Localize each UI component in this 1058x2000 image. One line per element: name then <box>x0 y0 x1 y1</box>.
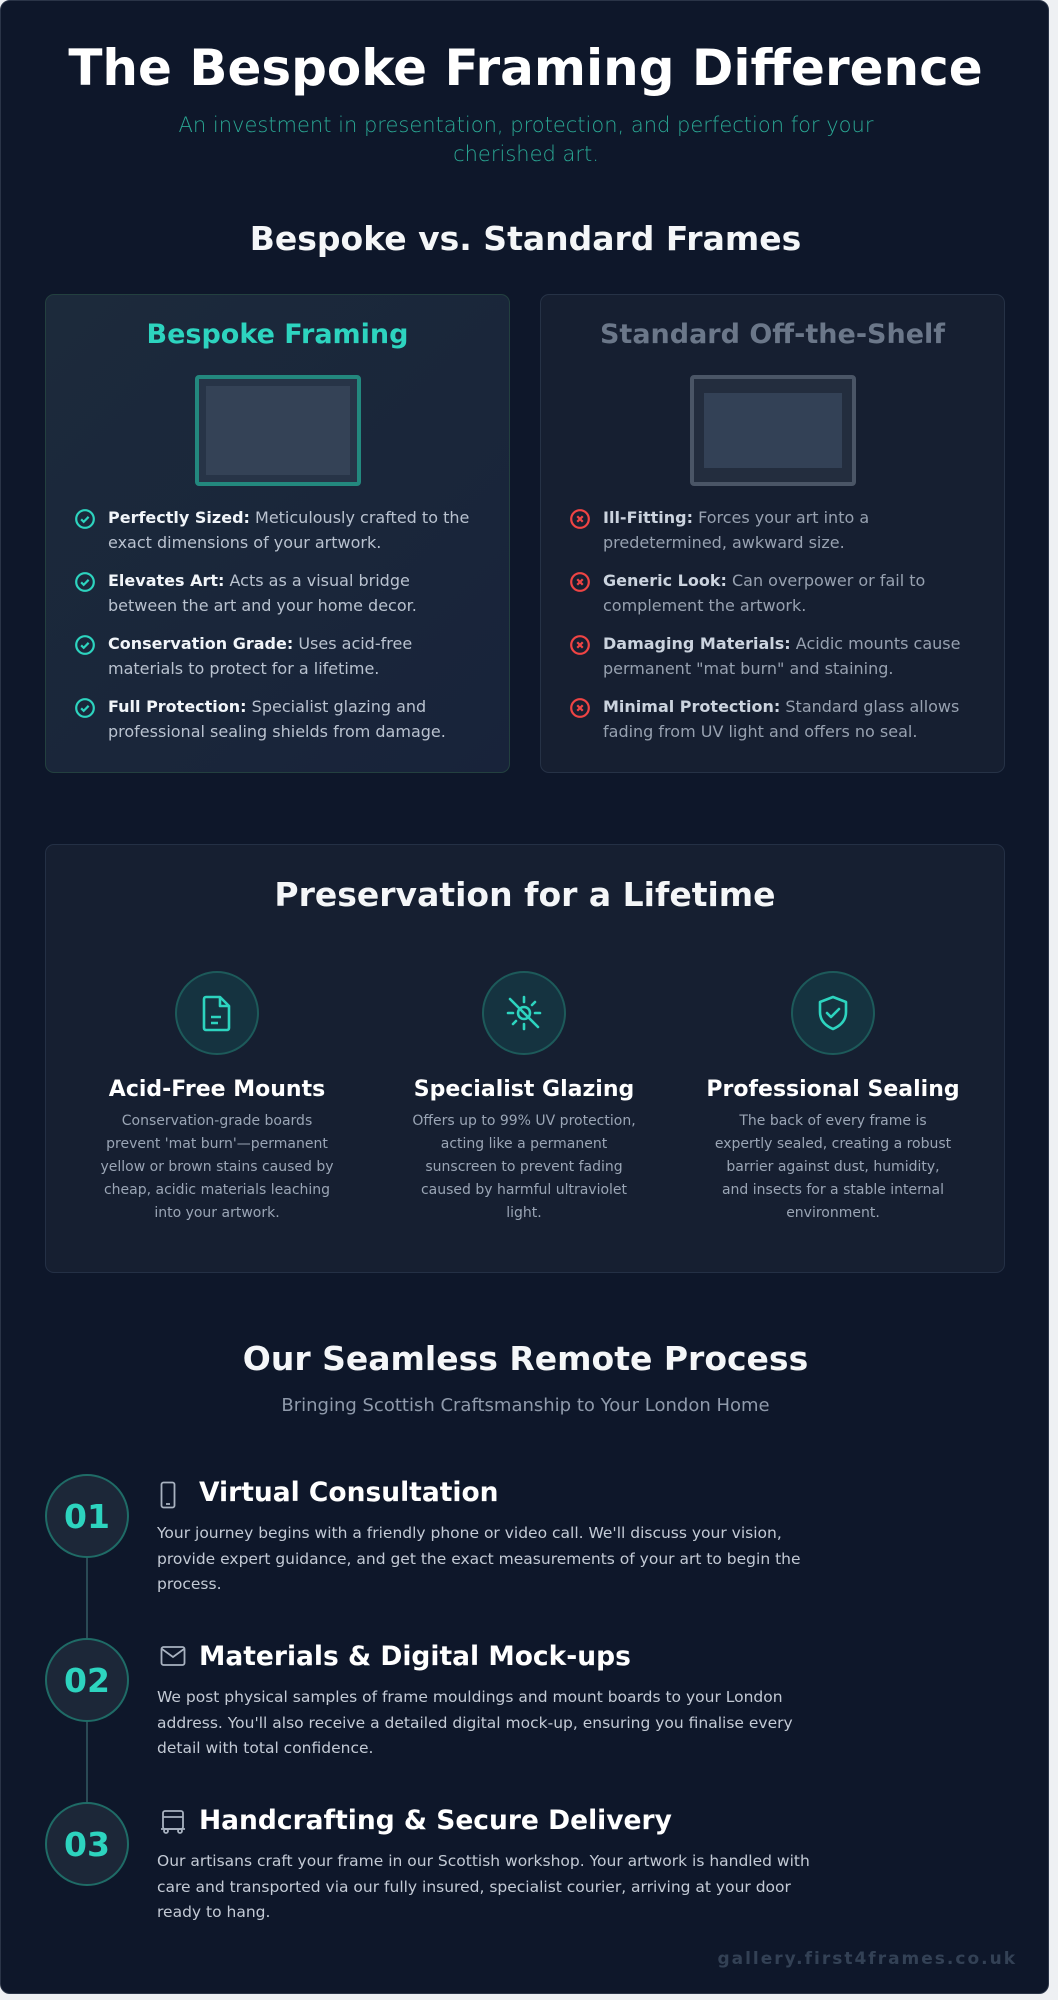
step 03: 03 <box>64 1824 110 1864</box>
text: Handcrafting & Secure Delivery <box>199 1805 672 1836</box>
feature: acid-free mounts: Conservation-grade boards prevent 'mat burn'—permanent yellow or brown stains caused by cheap, acidic materials leaching into your artwork. <box>100 1113 334 1221</box>
feature: specialist glazing: Offers up to 99% UV protection, acting like a permanent sunscreen to prevent fading caused by harmful ultraviolet light. <box>412 1113 636 1221</box>
list: bespoke benefits: Conservation Grade: Uses acid-free materials to protect for a lifetime. <box>108 634 412 678</box>
card title standard: Standard Off-the-Shelf <box>600 319 945 350</box>
title: The Bespoke Framing Difference <box>68 39 983 97</box>
step 03 <box>45 1802 129 1886</box>
text: We post physical samples of frame mouldings and mount boards to your London address. You'll also receive a detailed digital mock-up, ensuring you finalise every detail with total confidence. <box>157 1688 793 1757</box>
text: Our artisans craft your frame in our Scottish workshop. Your artwork is handled with care and transported via our fully insured, specialist courier, arriving at your door ready to hang. <box>157 1852 810 1921</box>
list: standard drawbacks: Ill-Fitting: Forces your art into a predetermined, awkward size. <box>603 508 869 552</box>
feature: acid-free mounts: Acid-Free Mounts <box>109 1077 325 1102</box>
text: Your journey begins with a friendly phone or video call. We'll discuss your vision, provide expert guidance, and get the exact measurements of your art to begin the process. <box>157 1524 801 1593</box>
timeline line <box>86 1557 88 1805</box>
icon: shield <box>791 971 875 1055</box>
step 01 <box>45 1474 129 1558</box>
list: standard drawbacks: Generic Look: Can overpower or fail to complement the artwork. <box>603 571 925 615</box>
feature: professional sealing: The back of every frame is expertly sealed, creating a robust barrier against dust, humidity, and insects for a stable internal environment. <box>715 1113 951 1221</box>
heading: preservation: Preservation for a Lifetime <box>274 875 776 914</box>
feature: professional sealing: Professional Sealing <box>706 1077 960 1102</box>
heading: comparison: Bespoke vs. Standard Frames <box>250 219 801 258</box>
list: bespoke benefits: Elevates Art: Acts as a visual bridge between the art and your home decor. <box>108 571 417 615</box>
card title bespoke: Bespoke Framing <box>146 319 408 350</box>
subtitle: An investment in presentation, protection, and perfection for your cherished art. <box>179 113 873 166</box>
icon: standard frame <box>690 375 856 486</box>
text: Materials & Digital Mock-ups <box>199 1641 631 1672</box>
feature: specialist glazing <box>412 971 636 1221</box>
feature: professional sealing <box>706 971 960 1221</box>
list: standard drawbacks <box>570 508 960 741</box>
list: bespoke benefits: Perfectly Sized: Meticulously crafted to the exact dimensions of your artwork. <box>108 508 469 552</box>
feature: specialist glazing: Specialist Glazing <box>414 1077 634 1102</box>
list: standard drawbacks: Damaging Materials: Acidic mounts cause permanent "mat burn" and staining. <box>603 634 960 678</box>
icon: document <box>175 971 259 1055</box>
icon: sun off <box>482 971 566 1055</box>
step 02 <box>45 1638 129 1722</box>
icon: bespoke frame <box>195 375 361 486</box>
panel: standard <box>540 294 1005 773</box>
list: bespoke benefits <box>75 508 469 741</box>
heading: process: Our Seamless Remote Process <box>243 1339 808 1378</box>
list: standard drawbacks: Minimal Protection: Standard glass allows fading from UV light and offers no seal. <box>603 697 959 741</box>
feature: acid-free mounts <box>100 971 334 1221</box>
step 01: 01 <box>64 1496 110 1536</box>
text: Virtual Consultation <box>199 1477 499 1508</box>
footer url: gallery.first4frames.co.uk <box>717 1949 1017 1969</box>
panel: bespoke <box>45 294 510 773</box>
panel: preservation <box>45 844 1005 1273</box>
process subtitle: Bringing Scottish Craftsmanship to Your London Home <box>281 1395 770 1416</box>
step 02: 02 <box>64 1660 110 1700</box>
list: bespoke benefits: Full Protection: Specialist glazing and professional sealing shields from damage. <box>108 697 446 741</box>
